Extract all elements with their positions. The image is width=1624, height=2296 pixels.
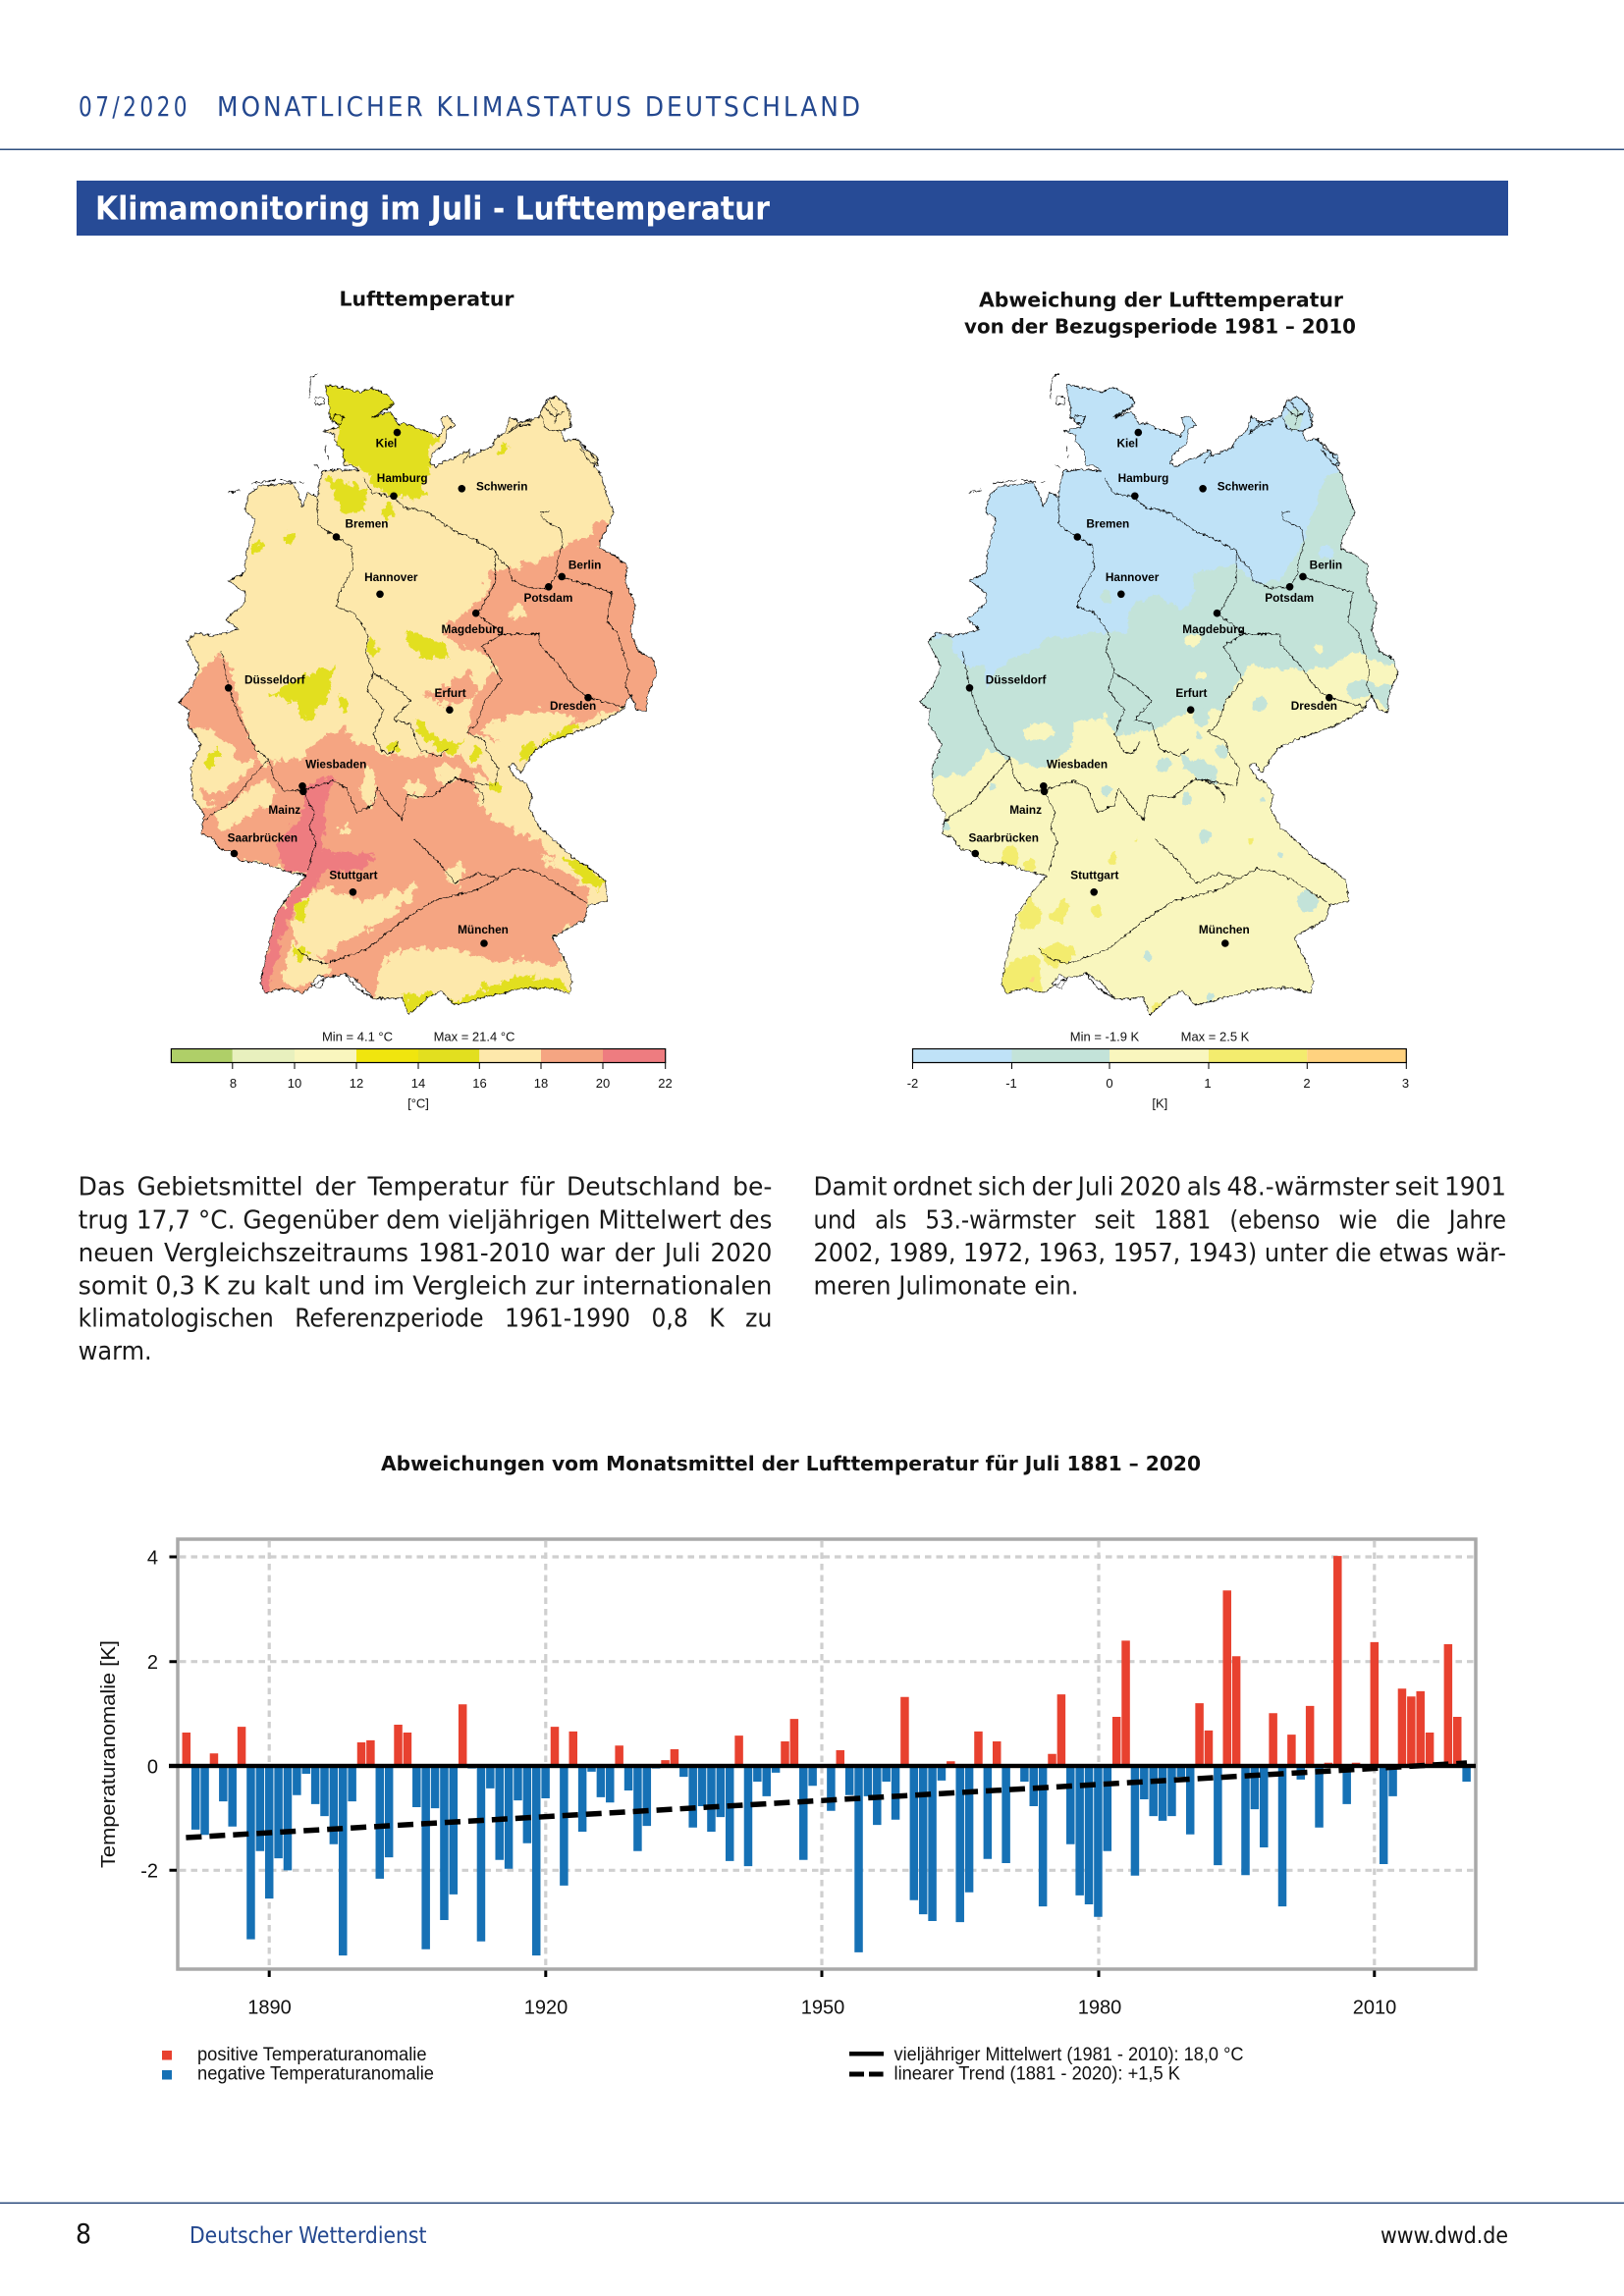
city markers and labels: Stuttgart <box>1070 868 1118 881</box>
region: -1 to 0 K <box>921 471 1395 779</box>
trend line <box>186 1763 1467 1838</box>
city markers and labels: Berlin <box>568 558 601 571</box>
x axis labels: 1920 <box>524 1997 568 2018</box>
city markers and labels: Stuttgart <box>329 868 378 881</box>
x axis labels: 2010 <box>1353 1997 1396 2018</box>
colour legend: temperature <box>171 1029 673 1111</box>
colour legend: temperature: 12 <box>350 1076 363 1091</box>
city markers and labels <box>966 429 1342 947</box>
colour legend: anomaly: 3 <box>1402 1076 1409 1091</box>
page header: issue and publication title <box>0 90 1624 150</box>
map: air temperature <box>178 373 657 1015</box>
city markers and labels: Hannover <box>1106 570 1160 584</box>
chart legend: linearer Trend (1881 - 2020): +1,5 K <box>893 2063 1180 2085</box>
city markers and labels: Potsdam <box>1265 591 1314 605</box>
city markers and labels: Hamburg <box>377 471 428 485</box>
city markers and labels: Erfurt <box>435 686 466 700</box>
colour legend: temperature: 10 <box>288 1076 301 1091</box>
colour legend: temperature: 16 <box>472 1076 487 1091</box>
region: pale yellow patches in the teal zone <box>1024 635 1406 740</box>
city markers and labels: Mainz <box>268 803 300 817</box>
colour legend: anomaly: [K] <box>1152 1095 1167 1111</box>
region: teal patches in the yellow zone <box>943 681 1364 1002</box>
colour legend: anomaly: -2 <box>907 1076 918 1091</box>
page footer: 8 <box>76 2217 91 2250</box>
text block: right column: 2002, 1989, 1972, 1963, 1957, 1943) unter die etwas wär- <box>813 1239 1506 1268</box>
x axis labels <box>247 1997 1396 2018</box>
text block: left column: neuen Vergleichszeitraums 1981-2010 war der Juli 2020 <box>79 1239 772 1268</box>
page header: issue and publication title: MONATLICHER KLIMASTATUS DEUTSCHLAND <box>217 90 863 123</box>
colour legend: anomaly: Min = -1.9 K <box>1070 1029 1140 1044</box>
colour legend: anomaly: 2 <box>1303 1076 1311 1091</box>
colour legend: temperature: 8 <box>230 1076 237 1091</box>
bars: negative anomalies <box>191 1766 1471 1955</box>
y axis labels: -2 <box>140 1861 158 1883</box>
city markers and labels: Wiesbaden <box>1047 758 1108 772</box>
bar chart: July temperature anomalies 1881-2020 <box>98 1539 1476 2018</box>
city markers and labels: Hannover <box>364 570 418 584</box>
x axis labels: 1890 <box>247 1997 292 2018</box>
chart legend <box>162 2045 1243 2085</box>
colour legend: temperature: [°C] <box>407 1095 429 1111</box>
colour legend: temperature: 22 <box>658 1076 673 1091</box>
city markers and labels: Saarbrücken <box>968 830 1039 844</box>
title banner <box>77 181 1508 236</box>
city markers and labels: Hamburg <box>1118 471 1168 485</box>
text block: right column <box>813 1172 1506 1301</box>
region: coolest 14-16 degree zones <box>204 385 606 1013</box>
plot frame <box>178 1539 1476 1969</box>
y axis labels: 0 <box>147 1757 158 1779</box>
heading: right map <box>964 289 1356 338</box>
page footer: Deutscher Wetterdienst <box>189 2223 426 2249</box>
map: temperature anomaly <box>919 373 1399 1017</box>
colour legend: anomaly <box>907 1029 1409 1111</box>
heading: right map: von der Bezugsperiode 1981 – 2010 <box>964 314 1356 338</box>
region: 16-18 degree patches inside warm zones <box>198 603 591 988</box>
region: 1 to 2 K patches <box>999 839 1253 1023</box>
city markers and labels: Wiesbaden <box>305 758 366 772</box>
colour legend: anomaly: 1 <box>1204 1076 1212 1091</box>
text block: left column: trug 17,7 °C. Gegenüber dem vieljährigen Mittelwert des <box>79 1205 772 1235</box>
city markers and labels: Saarbrücken <box>228 830 298 844</box>
text block: right column: Damit ordnet sich der Juli 2020 als 48.-wärmster seit 1901 <box>813 1172 1506 1201</box>
region: -2 to -1 K <box>933 385 1339 689</box>
city markers and labels <box>225 429 601 947</box>
chart legend: positive Temperaturanomalie <box>197 2045 426 2065</box>
city markers and labels: Kiel <box>1116 436 1138 450</box>
colour legend: anomaly: -1 <box>1005 1076 1017 1091</box>
city markers and labels: Düsseldorf <box>244 673 305 687</box>
city markers and labels: München <box>1199 923 1250 936</box>
colour legend: temperature: Max = 21.4 °C <box>434 1029 514 1044</box>
region: warmest zone along the Rhine <box>261 775 376 993</box>
y axis labels: 2 <box>147 1652 158 1674</box>
x axis labels: 1980 <box>1078 1997 1121 2018</box>
city markers and labels: Mainz <box>1009 803 1042 817</box>
city markers and labels: Dresden <box>1291 699 1337 713</box>
city markers and labels: Erfurt <box>1175 686 1208 700</box>
axis ticks <box>169 1557 1375 1977</box>
reference line: long-term mean <box>169 1764 1476 1768</box>
colour legend: temperature: Min = 4.1 °C <box>322 1029 393 1044</box>
city markers and labels: Düsseldorf <box>986 673 1046 687</box>
chart legend: negative Temperaturanomalie <box>197 2063 434 2085</box>
city markers and labels: Magdeburg <box>1182 622 1245 636</box>
colour legend: temperature: 20 <box>596 1076 610 1091</box>
city markers and labels: Bremen <box>346 516 388 530</box>
city markers and labels: Kiel <box>376 436 397 450</box>
chart legend: vieljähriger Mittelwert (1981 - 2010): 18,0 °C <box>893 2045 1243 2065</box>
colour legend: temperature: 14 <box>411 1076 425 1091</box>
y axis title: Temperaturanomalie [K] <box>98 1640 120 1868</box>
colour legend: temperature: 18 <box>534 1076 548 1091</box>
city markers and labels: Potsdam <box>523 591 572 605</box>
city markers and labels: Bremen <box>1086 516 1129 530</box>
heading: right map: Abweichung der Lufttemperatur <box>979 289 1343 312</box>
text block: left column: warm. <box>79 1337 152 1366</box>
page footer <box>0 2203 1624 2250</box>
page header: issue and publication title: 07/2020 <box>79 90 190 123</box>
heading: left map: Lufttemperatur <box>340 287 514 310</box>
chart heading: Abweichungen vom Monatsmittel der Lufttemperatur für Juli 1881 – 2020 <box>381 1452 1201 1475</box>
text block: left column <box>79 1172 772 1366</box>
text block: left column: somit 0,3 K zu kalt und im Vergleich zur internationalen <box>79 1271 772 1301</box>
text block: right column: meren Julimonate ein. <box>813 1271 1078 1301</box>
text block: left column: klimatologischen Referenzperiode 1961-1990 0,8 K zu <box>79 1305 772 1334</box>
region: 18-20 degree zones <box>172 522 671 1008</box>
text block: left column: Das Gebietsmittel der Temperatur für Deutschland be- <box>79 1172 772 1201</box>
y axis labels: 4 <box>147 1547 158 1569</box>
city markers and labels: Schwerin <box>476 479 527 493</box>
city markers and labels: Berlin <box>1310 558 1342 571</box>
city markers and labels: Dresden <box>550 699 596 713</box>
y axis labels <box>140 1547 158 1883</box>
colour legend: anomaly: 0 <box>1106 1076 1113 1091</box>
gridlines <box>180 1541 1474 1967</box>
x axis labels: 1950 <box>801 1997 844 2018</box>
page footer: www.dwd.de <box>1380 2223 1508 2249</box>
city markers and labels: Schwerin <box>1218 479 1269 493</box>
city markers and labels: München <box>458 923 509 936</box>
text block: right column: und als 53.-wärmster seit 1881 (ebenso wie die Jahre <box>813 1205 1506 1235</box>
colour legend: anomaly: Max = 2.5 K <box>1181 1029 1250 1044</box>
title banner: Klimamonitoring im Juli - Lufttemperatur <box>95 188 770 228</box>
bars: positive anomalies <box>183 1556 1461 1766</box>
city markers and labels: Magdeburg <box>442 622 504 636</box>
